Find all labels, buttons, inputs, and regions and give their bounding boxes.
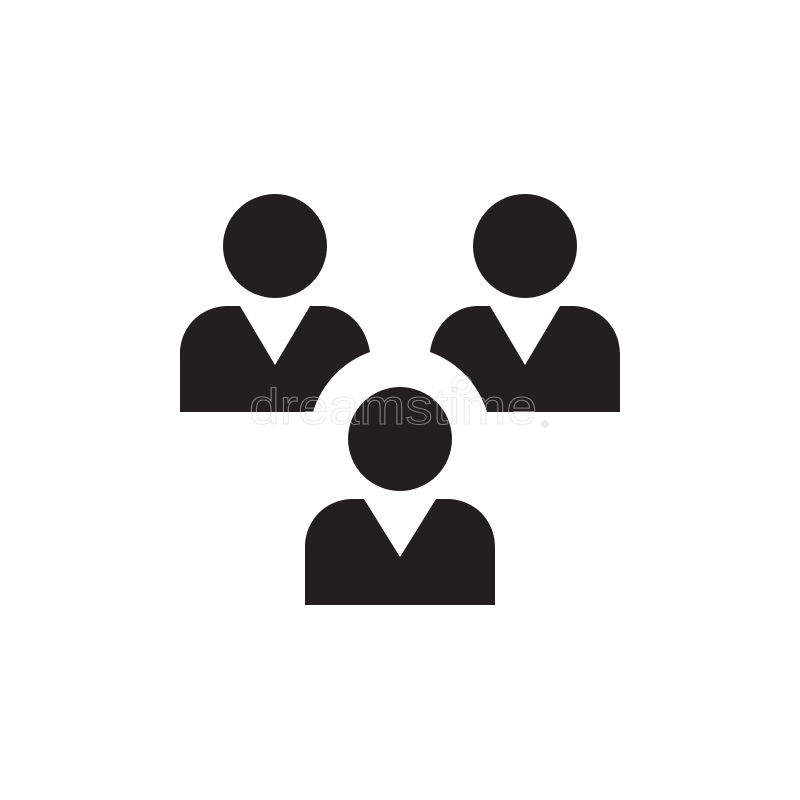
person: top right: [430, 194, 620, 412]
watermark: dreamstime: dreamstime: [249, 379, 537, 435]
person: top left: [180, 194, 370, 412]
person: bottom centre: [305, 387, 495, 605]
